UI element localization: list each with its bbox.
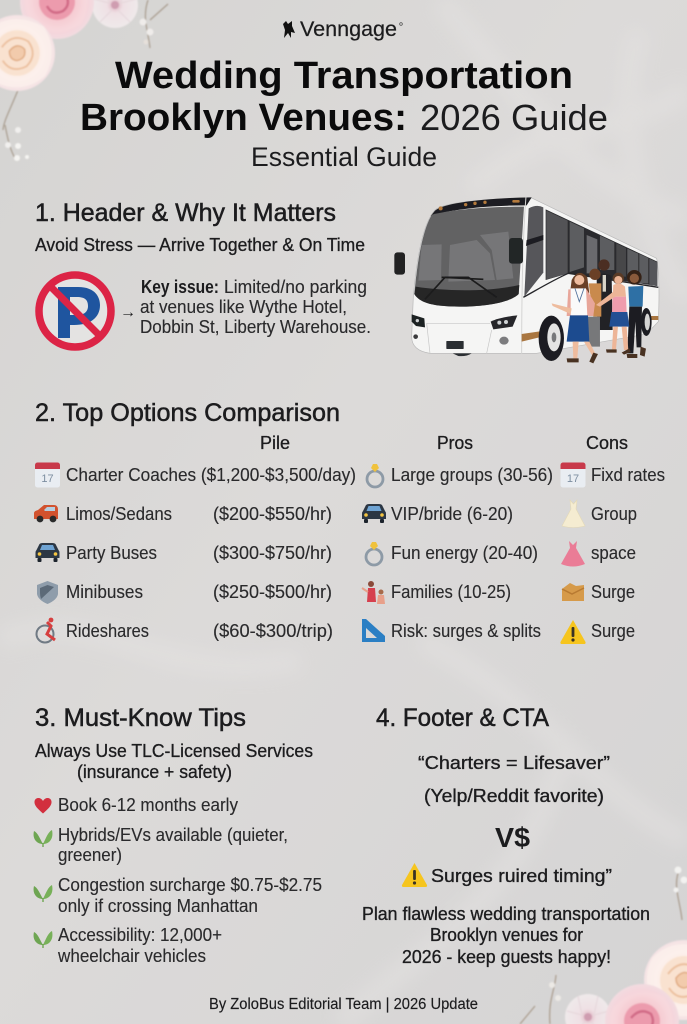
tip: hybrids xyxy=(34,825,288,865)
row: limos and sedans: Group xyxy=(591,504,637,524)
side windows xyxy=(546,209,657,286)
florals: bottom right xyxy=(520,866,687,1024)
row: rideshares: Surge xyxy=(591,621,635,641)
icon: warning xyxy=(402,863,427,887)
tip: book early: Book 6-12 months early xyxy=(58,795,238,815)
row: party buses: space xyxy=(591,543,636,563)
row: party buses: Fun energy (20-40) xyxy=(391,543,538,563)
tip: congestion: only if crossing Manhattan xyxy=(58,896,258,916)
row: rideshares: ($60-$300/trip) xyxy=(213,621,333,641)
section 3: must-know tips xyxy=(34,704,322,966)
column headers: Cons xyxy=(586,433,628,453)
section 4: footer and CTA xyxy=(362,704,650,967)
row: limos and sedans: ($200-$550/hr) xyxy=(213,504,332,524)
heading: 3. Must-Know Tips xyxy=(35,704,246,732)
row: rideshares: Risk: surges & splits xyxy=(391,621,541,641)
call to action xyxy=(362,903,650,967)
icon: handshake box xyxy=(562,583,584,601)
wheels xyxy=(539,316,564,361)
icon: dark car xyxy=(36,543,60,562)
brand logo: Venngage: Venngage xyxy=(300,18,397,41)
icon: calendar xyxy=(560,462,586,488)
tip: hybrids: greener) xyxy=(58,845,122,865)
lead text: (insurance + safety) xyxy=(77,762,232,782)
column headers xyxy=(260,433,628,453)
title: Brooklyn Venues: xyxy=(80,97,407,139)
title xyxy=(80,55,608,139)
icon: ring xyxy=(366,542,382,565)
heading: 1. Header & Why It Matters xyxy=(35,199,336,227)
key issue text xyxy=(140,277,371,337)
row: minibuses: Surge xyxy=(591,582,635,602)
icon: calendar xyxy=(35,462,60,488)
tip: accessibility xyxy=(34,925,222,966)
column headers: Pros xyxy=(437,433,473,453)
icon: orange car xyxy=(34,505,58,522)
title: 2026 Guide xyxy=(420,97,608,138)
mirror right xyxy=(509,238,523,264)
quote xyxy=(418,752,610,806)
row: minibuses: Minibuses xyxy=(66,582,143,602)
section 2: options comparison xyxy=(34,399,665,644)
guest 3 xyxy=(597,259,613,330)
quote: (Yelp/Reddit favorite) xyxy=(424,785,604,806)
icon: ring xyxy=(367,464,383,487)
heading: 4. Footer & CTA xyxy=(376,704,549,732)
guests xyxy=(552,259,646,363)
row: minibuses xyxy=(37,581,635,604)
key issue text: Limited/no parking xyxy=(224,277,367,297)
icon: family xyxy=(362,581,385,604)
tip: congestion xyxy=(34,875,322,916)
icon: dark car xyxy=(362,504,386,523)
row: charter coaches xyxy=(35,462,665,488)
tip: accessibility: wheelchair vehicles xyxy=(57,946,206,966)
tip: congestion: Congestion surcharge $0.75-$2.75 xyxy=(58,875,322,895)
row: charter coaches: Large groups (30-56) xyxy=(391,465,553,485)
row: limos and sedans xyxy=(34,500,637,528)
tip: hybrids: Hybrids/EVs available (quieter, xyxy=(58,825,288,845)
key issue text: at venues like Wythe Hotel, xyxy=(140,297,347,317)
key issue text: Dobbin St, Liberty Warehouse. xyxy=(140,317,371,337)
florals: top left xyxy=(0,0,168,161)
icon: no parking xyxy=(39,275,111,347)
row: charter coaches: Fixd rates xyxy=(591,465,665,485)
row: rideshares xyxy=(36,618,635,644)
column headers: Pile xyxy=(260,433,290,453)
row: charter coaches: Charter Coaches ($1,200-$3,500/day) xyxy=(66,465,356,485)
row: limos and sedans: VIP/bride (6-20) xyxy=(391,504,513,524)
quote: “Charters = Lifesaver” xyxy=(418,752,610,773)
guest 5 xyxy=(627,270,646,358)
windshield xyxy=(414,207,524,307)
headlights xyxy=(412,314,425,327)
lead text: Always Use TLC-Licensed Services xyxy=(35,741,313,761)
guest 1 xyxy=(552,273,598,363)
call to action: 2026 - keep guests happy! xyxy=(402,946,611,967)
counter quote: Surges ruired timing” xyxy=(431,865,612,886)
guest 2 xyxy=(587,269,601,347)
icon: pink dress xyxy=(561,541,585,566)
section 1: why it matters xyxy=(35,199,371,347)
subheading: Avoid Stress — Arrive Together & On Time xyxy=(35,235,365,255)
guest 4 xyxy=(596,273,631,355)
icon: wheelchair xyxy=(36,618,55,642)
icon: shield xyxy=(37,581,58,604)
key issue text: Key issue: xyxy=(141,277,219,297)
row: minibuses: Families (10-25) xyxy=(391,582,511,602)
row: rideshares: Rideshares xyxy=(66,621,149,641)
tip: accessibility: Accessibility: 12,000+ xyxy=(58,925,222,945)
arrow: → xyxy=(120,304,136,321)
illustration: coach bus with guests xyxy=(394,197,659,363)
lead text xyxy=(35,741,313,782)
icon: ramp xyxy=(362,619,385,642)
row: limos and sedans: Limos/Sedans xyxy=(66,504,172,524)
heading: 2. Top Options Comparison xyxy=(35,399,340,427)
icon: cream dress xyxy=(562,500,585,528)
row: party buses: Party Buses xyxy=(66,543,157,563)
call to action: Plan flawless wedding transportation xyxy=(362,903,650,924)
versus: V$ xyxy=(495,822,530,853)
row: minibuses: ($250-$500/hr) xyxy=(213,582,332,602)
title: Wedding Transportation xyxy=(115,55,573,97)
footer credit: By ZoloBus Editorial Team | 2026 Update xyxy=(209,996,478,1013)
row: party buses: ($300-$750/hr) xyxy=(213,543,332,563)
row: party buses xyxy=(36,541,636,566)
mirror left xyxy=(394,252,405,275)
icon: warning xyxy=(560,620,586,644)
call to action: Brooklyn venues for xyxy=(430,924,583,945)
subtitle: Essential Guide xyxy=(251,142,437,172)
